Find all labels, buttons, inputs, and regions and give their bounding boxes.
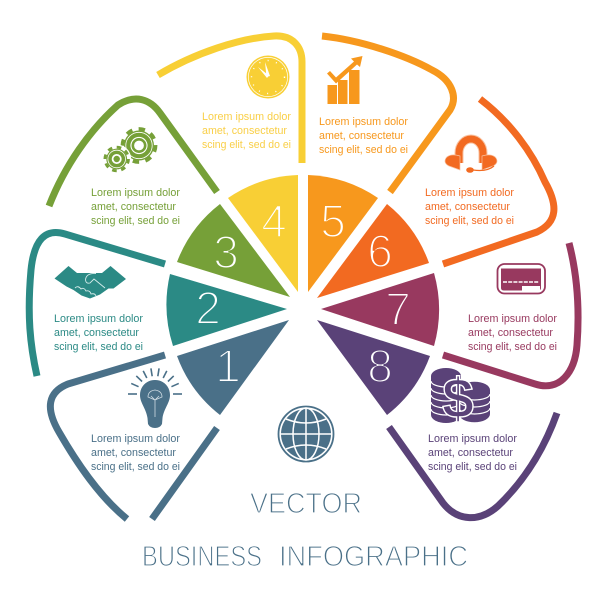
segment 6 (317, 204, 429, 298)
segment 1: 1 (215, 340, 241, 392)
panel 1 text (91, 433, 180, 473)
segment 5: 5 (320, 195, 346, 247)
panel 5: growth (319, 36, 453, 192)
segment 3 (177, 204, 290, 297)
segment 6: 6 (367, 225, 393, 277)
panel 2 text: amet, consectetur (54, 327, 139, 339)
segment 4 (228, 175, 298, 292)
panel 3 outline (49, 99, 217, 206)
panel 7 text: scing elit, sed do ei (468, 341, 557, 353)
icon: globe (278, 406, 334, 462)
pie chart: eight numbered segments (166, 175, 439, 415)
panel 5 text: amet, consectetur (319, 130, 404, 142)
panel 1 text: Lorem ipsum dolor (91, 433, 180, 445)
panel 4 text: amet, consectetur (202, 125, 287, 137)
segment 7 (321, 273, 439, 346)
segment 2 (166, 274, 287, 346)
segment 2: 2 (195, 282, 221, 334)
icon: coin stacks (431, 367, 490, 431)
panel 1 text: amet, consectetur (91, 447, 176, 459)
panel 3 text: scing elit, sed do ei (91, 215, 180, 227)
panel 6 text: amet, consectetur (425, 201, 510, 213)
panel 8 text: scing elit, sed do ei (428, 461, 517, 473)
panel 8 text: amet, consectetur (428, 447, 513, 459)
panel 4 text (202, 111, 291, 151)
panel 6 text: Lorem ipsum dolor (425, 187, 514, 199)
panel 7 text: Lorem ipsum dolor (468, 313, 557, 325)
segment 8 (317, 320, 430, 415)
panel 6 outline (443, 99, 554, 264)
panel 1: idea (50, 355, 217, 519)
panel 5 text: Lorem ipsum dolor (319, 116, 408, 128)
segment 8: 8 (367, 340, 393, 392)
segment 1 (177, 320, 289, 415)
panel 2 outline (29, 232, 165, 376)
segment 4: 4 (261, 195, 287, 247)
segment 3: 3 (213, 226, 239, 278)
segment 7: 7 (385, 283, 411, 335)
panel 2 text (54, 313, 143, 353)
panel 3: settings (49, 99, 217, 227)
title: VECTOR: VECTOR (250, 488, 362, 520)
panel 6 text: scing elit, sed do ei (425, 215, 514, 227)
panel 1 text: scing elit, sed do ei (91, 461, 180, 473)
panel 6: support (425, 99, 554, 264)
title: BUSINESS INFOGRAPHIC: INFOGRAPHIC (279, 541, 468, 573)
panel 7 text: amet, consectetur (468, 327, 553, 339)
panel 7 text (468, 313, 557, 353)
panel 4 outline (158, 36, 302, 163)
panel 5 text (319, 116, 408, 156)
panel 2 text: scing elit, sed do ei (54, 341, 143, 353)
panel 8 text (428, 433, 517, 473)
icon: headset (445, 139, 497, 173)
panel 4 text: Lorem ipsum dolor (202, 111, 291, 123)
panel 8 text: Lorem ipsum dolor (428, 433, 517, 445)
panel 8: money (389, 367, 557, 518)
panel 3 text: amet, consectetur (91, 201, 176, 213)
panel 5 outline (322, 36, 453, 192)
title: BUSINESS INFOGRAPHIC (142, 541, 468, 573)
title: BUSINESS INFOGRAPHIC: BUSINESS (142, 541, 262, 573)
icon: gears (102, 129, 156, 174)
panel 6 text (425, 187, 514, 227)
panel 2: partnership (29, 232, 165, 376)
icon: rising bar chart (327, 56, 362, 104)
panel 1 outline (50, 355, 217, 519)
panel 4 text: scing elit, sed do ei (202, 139, 291, 151)
icon: clock (246, 56, 290, 98)
panel 8 outline (389, 413, 557, 518)
icon: coin stacks: $ (442, 367, 474, 431)
segment 5 (308, 175, 378, 292)
icon: handshake (54, 266, 126, 298)
panel 3 text: Lorem ipsum dolor (91, 187, 180, 199)
panel 3 text (91, 187, 180, 227)
panel 4: time (158, 36, 302, 163)
icon: credit card (498, 264, 545, 294)
panel 5 text: scing elit, sed do ei (319, 144, 408, 156)
panel 7 outline (443, 243, 578, 386)
panel 2 text: Lorem ipsum dolor (54, 313, 143, 325)
panel 7: payment (443, 243, 578, 386)
icon: light bulb (128, 368, 182, 428)
